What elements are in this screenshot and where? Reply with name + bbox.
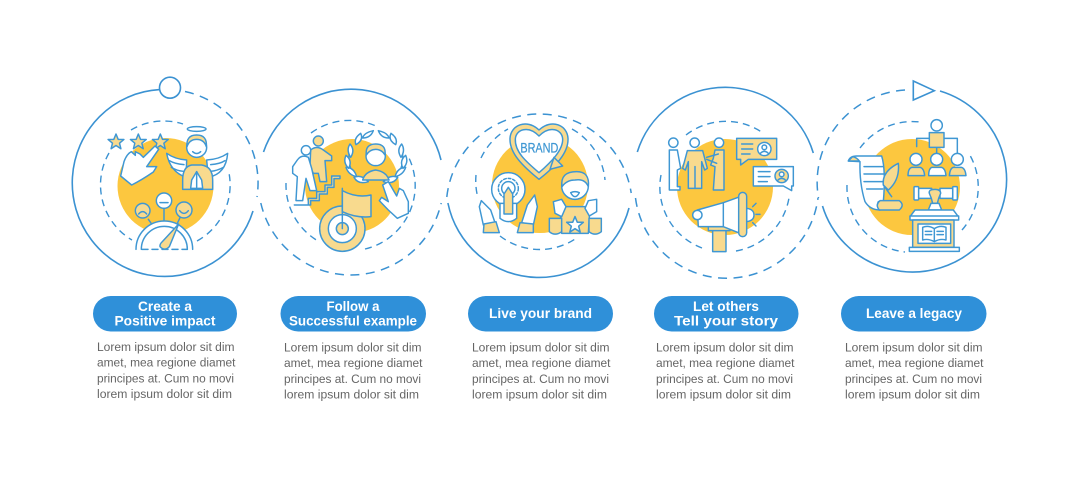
label pill [280, 296, 426, 332]
body text: Lorem ipsum dolor sit dim [845, 340, 982, 354]
label pill [93, 296, 237, 332]
inner dashed ring [660, 121, 789, 251]
outer ring [447, 114, 631, 277]
icon: scroll, feather, org chart, podium [848, 120, 966, 251]
inner dashed ring [101, 121, 230, 241]
icon: people, speech bubbles, megaphone [669, 138, 793, 252]
icon: climbers, laurel, target flag, hand [293, 131, 408, 251]
body text [845, 340, 984, 402]
body text: principes at. Cum no movi [845, 372, 982, 386]
label pill: Positive impact [114, 312, 216, 328]
yellow disc [492, 137, 588, 233]
body text: lorem ipsum dolor sit dim [284, 388, 419, 402]
outer ring [261, 89, 441, 275]
label pill: Tell your story [674, 312, 778, 328]
icon: stars, hand, angel, gauge [108, 127, 228, 249]
panel: let others tell your story [636, 87, 818, 402]
body text: amet, mea regione diamet [656, 356, 795, 370]
label pill [468, 296, 613, 332]
yellow disc [118, 138, 214, 234]
inner dashed ring [286, 120, 415, 249]
body text: amet, mea regione diamet [284, 356, 423, 370]
label pill: Leave a legacy [866, 305, 962, 321]
label pill: Successful example [289, 312, 417, 328]
label pill [654, 296, 798, 332]
panel: leave a legacy [817, 81, 1007, 402]
body text [656, 340, 795, 402]
label pill: Create a [138, 298, 192, 314]
body text: principes at. Cum no movi [656, 372, 793, 386]
panel: live your brand [447, 114, 631, 402]
body text: amet, mea regione diamet [472, 356, 611, 370]
label pill: Follow a [326, 298, 380, 314]
body text: Lorem ipsum dolor sit dim [97, 340, 234, 354]
outer ring [636, 87, 818, 278]
outer ring [817, 90, 1007, 272]
body text [284, 340, 423, 402]
body text: principes at. Cum no movi [284, 372, 421, 386]
yellow disc [864, 139, 960, 235]
yellow disc [677, 139, 773, 235]
start marker [160, 77, 180, 98]
yellow disc [305, 139, 399, 233]
panel: create a positive impact [72, 77, 258, 401]
body text: Lorem ipsum dolor sit dim [284, 340, 422, 354]
body text: amet, mea regione diamet [97, 356, 236, 370]
body text: Lorem ipsum dolor sit dim [472, 340, 610, 354]
label pill: Live your brand [489, 305, 592, 321]
body text: principes at. Cum no movi [472, 372, 609, 386]
panel: follow a successful example [261, 89, 441, 402]
body text: lorem ipsum dolor sit dim [97, 387, 232, 401]
outer ring [72, 90, 258, 276]
body text: lorem ipsum dolor sit dim [472, 388, 607, 402]
inner dashed ring [847, 122, 978, 252]
body text: Lorem ipsum dolor sit dim [656, 340, 794, 354]
body text [472, 340, 611, 402]
body text: amet, mea regione diamet [845, 356, 984, 370]
body text [97, 340, 236, 401]
label pill: Let others [693, 298, 759, 314]
body text: lorem ipsum dolor sit dim [656, 388, 791, 402]
icon: brand heart, bulb, hands, star person: BRAND [520, 141, 558, 156]
body text: principes at. Cum no movi [97, 371, 234, 385]
body text: lorem ipsum dolor sit dim [845, 388, 980, 402]
end marker triangle [913, 81, 934, 100]
icon: brand heart, bulb, hands, star person [479, 124, 601, 234]
inner dashed ring [476, 129, 605, 250]
label pill [841, 296, 986, 332]
